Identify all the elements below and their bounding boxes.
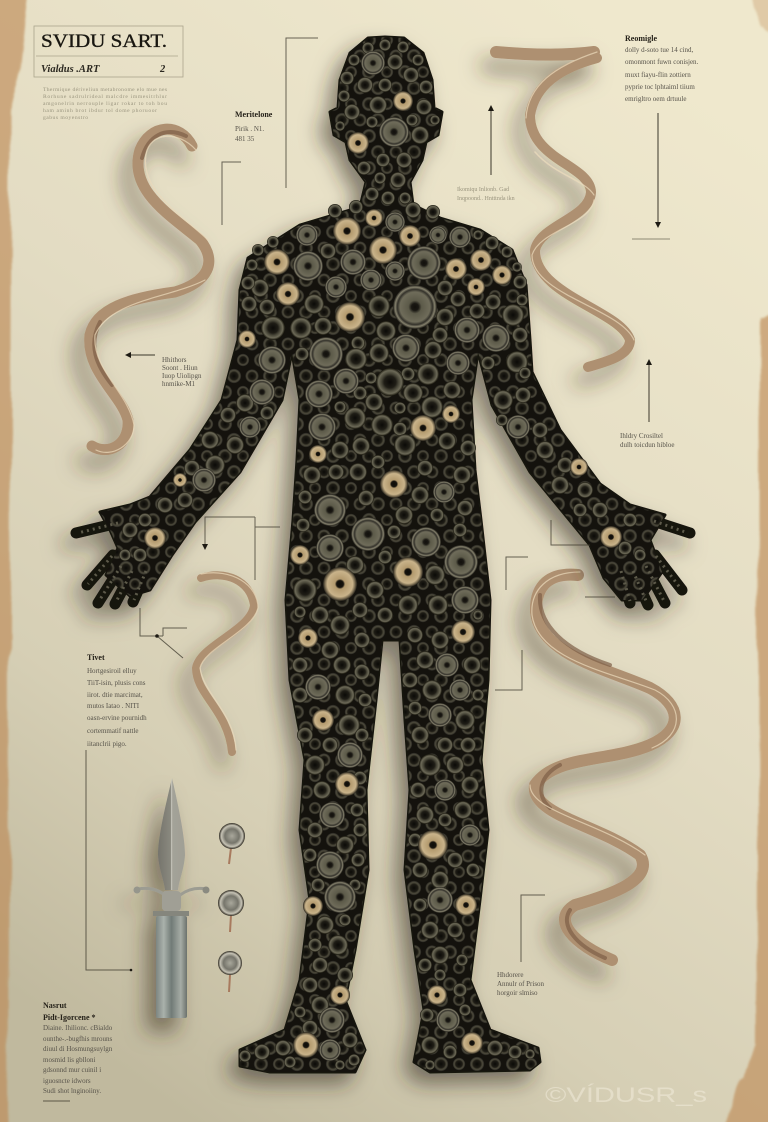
text block: Tivet: Hortgesiroil elluy [87,667,137,675]
arrow and caption: left ribbon: hnmike-M1 [162,380,196,388]
text block: Reomigle: dolly d-soto tue 14 cind, [625,46,693,54]
finger highlights [78,521,688,603]
label: Meritelone [235,110,273,143]
caption: upper middle: Ikomiqu Inlionb. Gad [457,187,509,193]
head buttons [335,39,440,205]
arrow and caption: left ribbon: Iuop Uiolipgn [162,372,202,380]
text block: Nasrut: mosmid lis gblloni [43,1056,96,1064]
caption: right arm: dulh toicdun hibloe [620,441,674,449]
title block: 2 [159,64,166,75]
text block: Reomigle: muxt fiayu-flin zottiern [625,71,691,79]
text block: Reomigle: pyprie toc lphtaiml tiium [625,83,695,91]
leader line and caption: right foot [497,895,545,997]
leader lines: right hip [495,520,615,690]
text block: Nasrut: Diaine. Ihilionc. cBialdo [43,1024,113,1032]
label: Meritelone: 481 35 [235,135,255,143]
text block: Reomigle [625,34,699,103]
intro text: gabus moyenstro [43,115,88,121]
label: Meritelone: Meritelone [235,110,273,119]
left leg buttons [239,656,372,1070]
caption: right arm: Ihldry Crosiltel [620,432,663,440]
text block: Reomigle: omonmont fuwn conisjen. [625,58,699,66]
text block: Nasrut: gdsonnd mur cuinil i [43,1066,101,1074]
text block: Nasrut: diuul di Hosmungsuylgn [43,1045,113,1053]
leader line: head [286,38,318,188]
text block: Reomigle: Reomigle [625,34,657,43]
dagger [134,778,210,1018]
text block: Nasrut: iguosncte idwors [43,1077,91,1085]
arrow and caption: left ribbon: Soont . Hiun [162,364,198,372]
text block: Tivet: iitanclrii pigo. [87,740,127,748]
figure: human body made of buttons [76,37,690,1072]
leader line and caption: right foot: horgoir slmiso [497,989,538,997]
ribbon: upper left [90,129,209,452]
title block: Vialdus .ART [41,64,100,75]
text block: Tivet [87,653,147,748]
ribbon: upper right [496,52,634,367]
arrow: up right [646,359,652,422]
text block: Tivet: iirot. dtie marcimat, [87,691,143,699]
leader line and caption: right foot: Annulr of Prison [497,980,545,988]
text block: Nasrut: Nasrut [43,1001,67,1010]
intro text: ham aminh brot ibdur tol dome phoruoor [43,108,157,114]
leader lines: left hand [140,608,187,658]
leader line: dagger [86,750,132,971]
body silhouette with shadow [76,37,690,1072]
right leg buttons [402,651,535,1070]
intro text [43,87,167,121]
leader line: Meritelone [222,162,241,225]
arrow: up to ribbon [488,105,494,175]
title block: SVIDU SART. [41,31,167,52]
title block [34,26,183,77]
caption: upper middle [457,187,515,202]
watermark: ©VÍDUSR_s [545,1084,707,1107]
label: Meritelone: Pirik . N1. [235,125,264,133]
ribbon: lower right [530,572,676,960]
arrow and caption: left ribbon [125,352,202,388]
text block: Nasrut: Pidt-Igorcene * [43,1013,96,1022]
text block: Tivet: oasn-ervine pournidh [87,714,147,722]
button texture under the figure [100,37,665,1072]
text block: Nasrut [43,1001,113,1101]
text block: Tivet: TiiT-isin, plusis cons [87,679,146,687]
arrow and caption: left ribbon: Hhithors [162,356,187,364]
leader lines: left hip [202,517,280,580]
chest and arm buttons [119,200,646,562]
ribbon: lower left [196,573,258,752]
arrow: down right [632,113,670,239]
text block: Tivet: Tivet [87,653,105,662]
intro text: Rorhune sadrulrideal malcdre immesitrhlur [43,94,167,100]
text block: Tivet: mutos Iatao . NITI [87,702,140,710]
text block: Reomigle: emrigltro oem drtuule [625,95,686,103]
text block: Nasrut: Sudi shot lnginoiiny. [43,1087,101,1095]
text block: Tivet: cortemmatif nattle [87,727,139,735]
sealing coins with drips [218,823,245,992]
intro text: amgonelrin nerrouple ligar rokar to toh bou [43,101,167,107]
intro text: Thermique dériveliun metabronome elo mue nes [43,87,167,93]
caption: upper middle: Inqpoond.. Hntttnda ikn [457,196,515,202]
text block: Nasrut: ounthe-.-bugfhis mrouns [43,1035,112,1043]
leader line and caption: right foot: Hhdorere [497,971,523,979]
abdomen and hip buttons [290,432,483,659]
caption: right arm [620,432,674,449]
